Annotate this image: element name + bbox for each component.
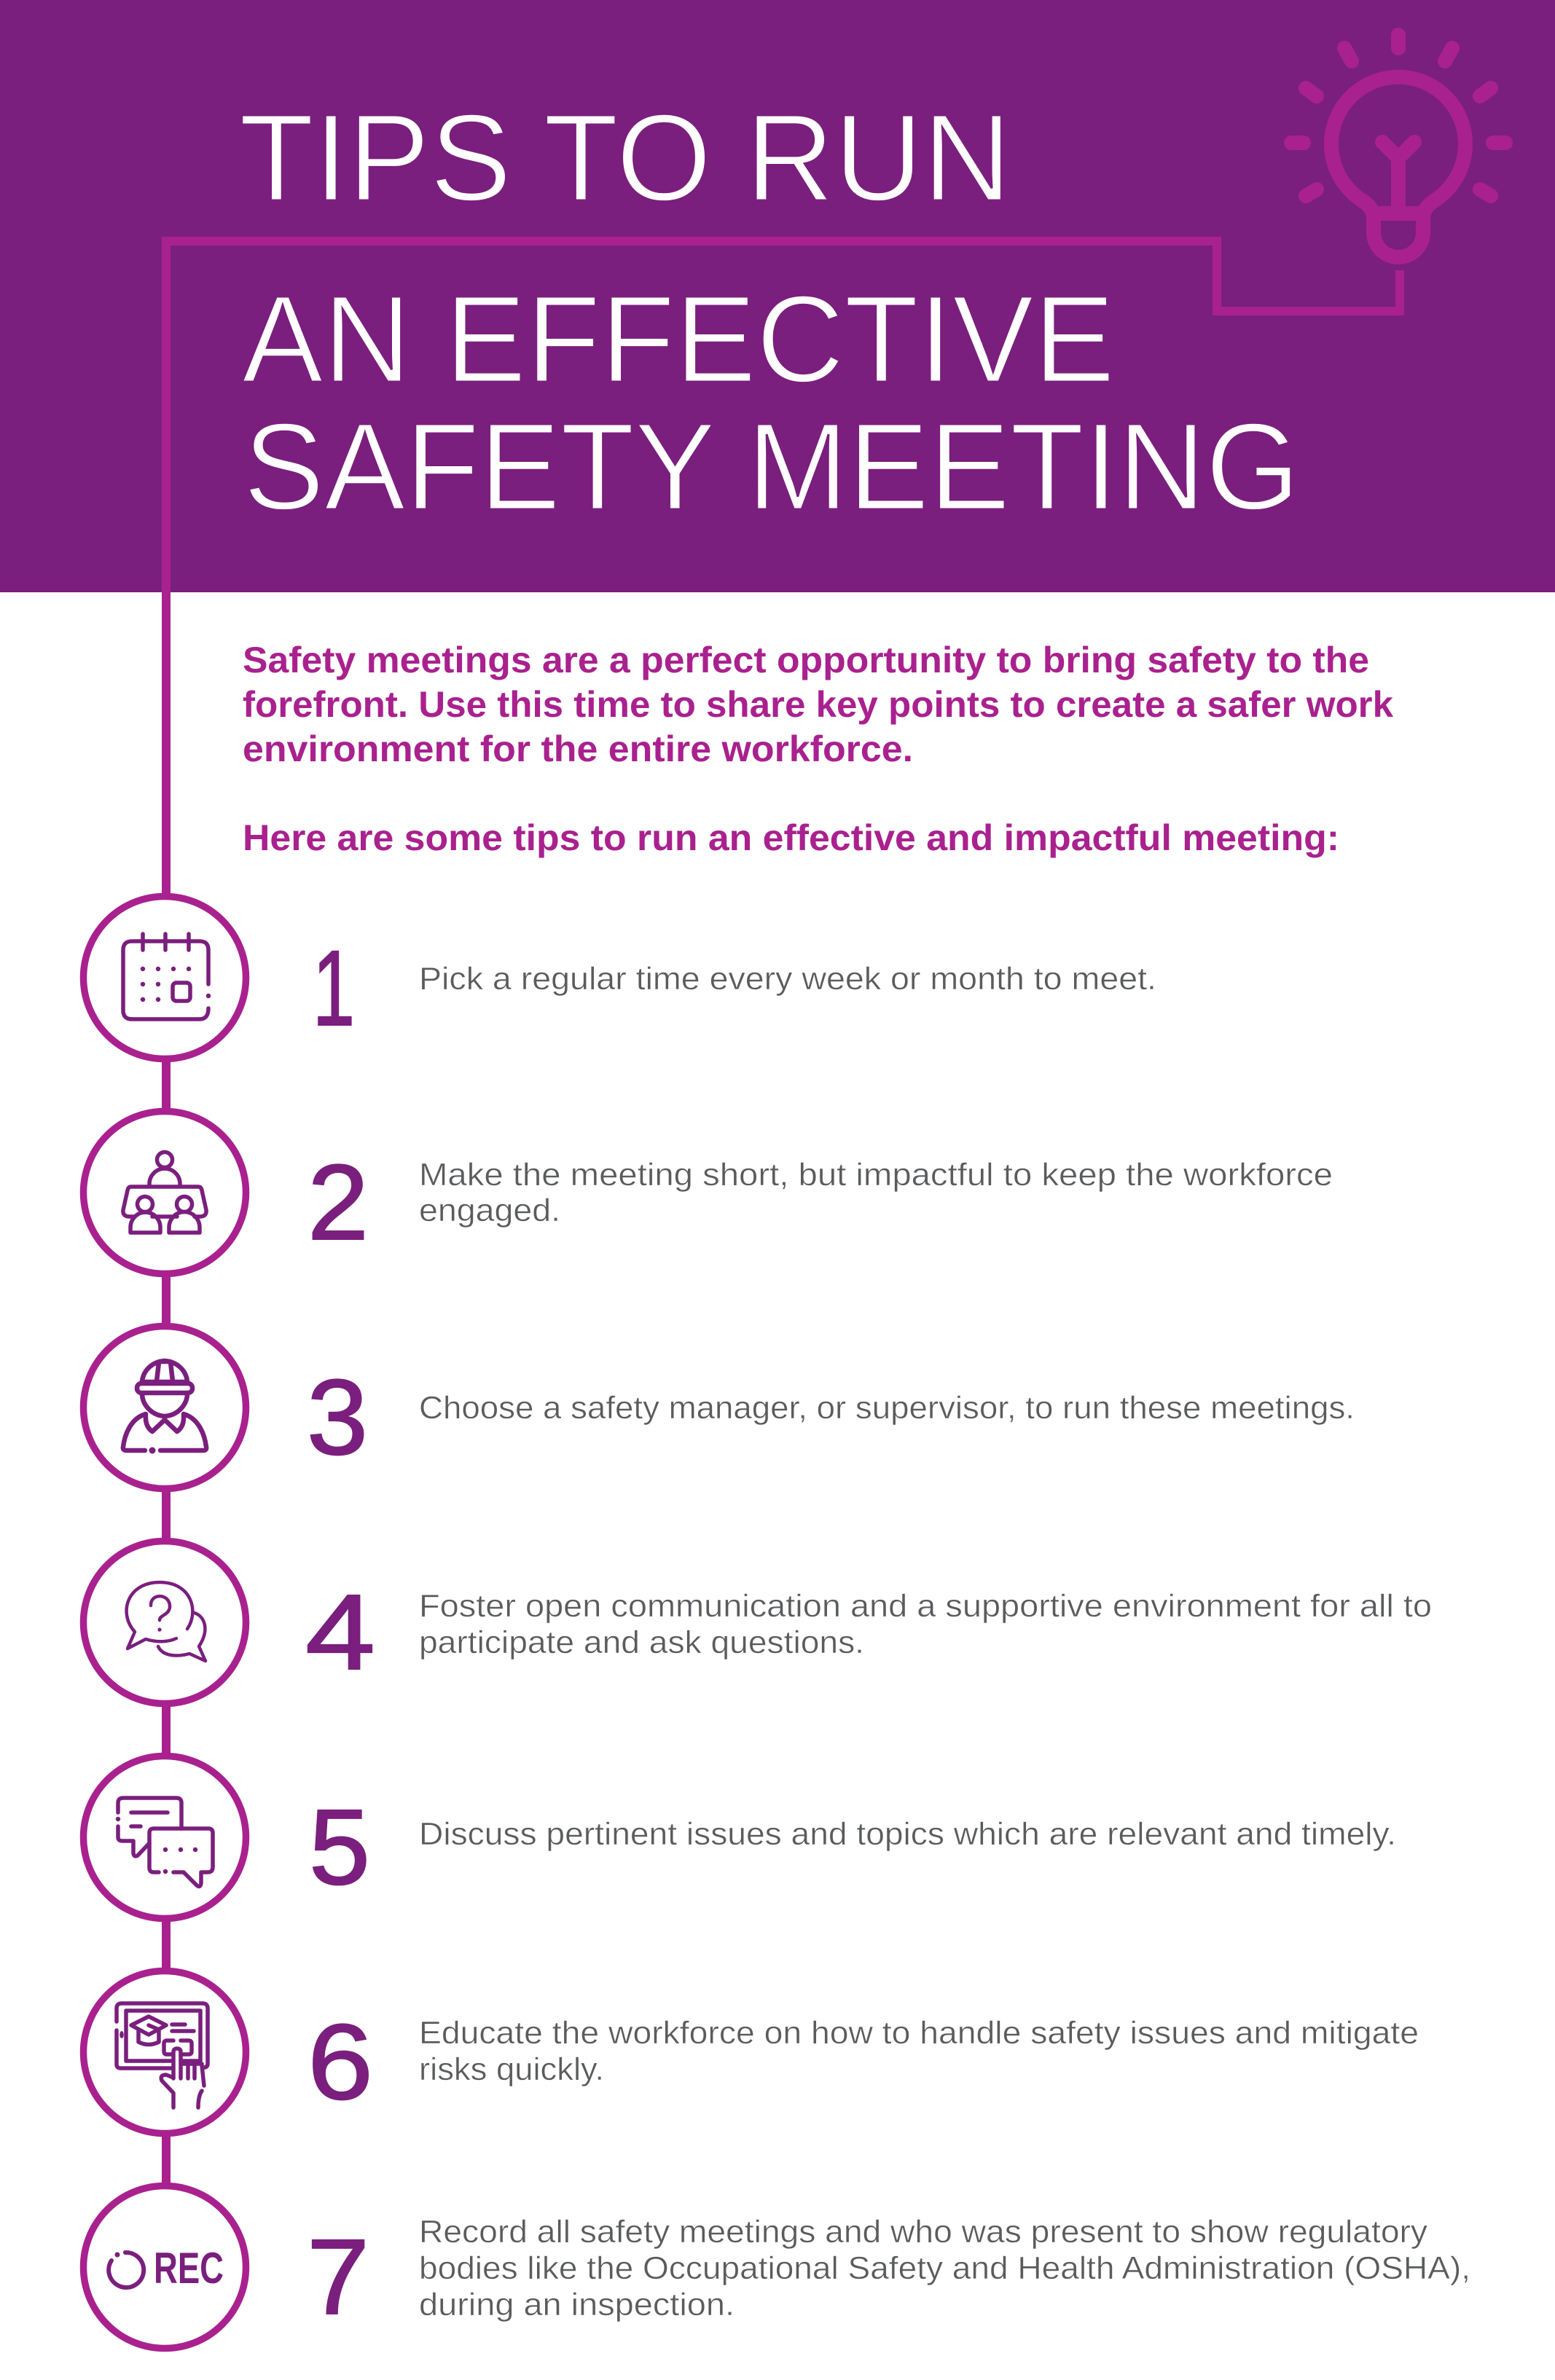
text 6: Educate the workforce on how to handle safety issues and mitigate	[419, 2015, 1419, 2051]
number 5: 5	[309, 1788, 370, 1907]
icon: calendar	[83, 896, 246, 1059]
step 2	[83, 1112, 1333, 1273]
header banner	[0, 0, 1555, 592]
icon: lightbulb	[1291, 35, 1505, 257]
step 4	[83, 1541, 1432, 1703]
connector line from lightbulb through steps	[166, 241, 1400, 2185]
number 3: 3	[307, 1358, 368, 1477]
text 1: Pick a regular time every week or month to meet.	[419, 961, 1156, 997]
text 4: participate and ask questions.	[419, 1625, 864, 1660]
text 5: Discuss pertinent issues and topics which are relevant and timely.	[419, 1816, 1396, 1852]
text 7: bodies like the Occupational Safety and Health Administration (OSHA),	[419, 2250, 1470, 2286]
step 1	[83, 896, 1156, 1059]
number 7: 7	[307, 2218, 369, 2337]
text 6: risks quickly.	[419, 2051, 604, 2087]
step 3	[83, 1326, 1355, 1489]
icon: chat bubbles	[83, 1756, 246, 1919]
title: AN EFFECTIVE	[242, 270, 1115, 409]
title: TIPS TO RUN	[239, 89, 1011, 227]
number 6: 6	[308, 2003, 373, 2122]
title	[239, 89, 1300, 536]
text 6	[419, 2015, 1419, 2087]
step 6	[83, 1971, 1419, 2133]
intro text: environment for the entire workforce.	[243, 728, 913, 769]
icon: meeting table	[83, 1112, 246, 1273]
number 1: 1	[313, 929, 355, 1048]
icon: REC	[83, 2185, 246, 2349]
number 4: 4	[305, 1573, 375, 1692]
title: SAFETY MEETING	[243, 398, 1300, 536]
intro text	[243, 640, 1393, 858]
icon: worker with hard hat	[83, 1326, 246, 1489]
text 2: Make the meeting short, but impactful to keep the workforce	[419, 1157, 1333, 1193]
icon: tablet with graduation cap and hand	[83, 1971, 246, 2133]
icon: question speech bubbles	[83, 1541, 246, 1703]
step 7	[83, 2185, 1470, 2349]
text 2: engaged.	[419, 1193, 560, 1228]
intro text: Safety meetings are a perfect opportunity to bring safety to the	[243, 640, 1369, 680]
text 7	[419, 2214, 1470, 2322]
icon: REC: REC	[154, 2244, 224, 2293]
text 7: during an inspection.	[419, 2287, 735, 2322]
intro text: Here are some tips to run an effective and impactful meeting:	[243, 817, 1339, 858]
step 5	[83, 1756, 1396, 1919]
text 2	[419, 1157, 1333, 1228]
text 3: Choose a safety manager, or supervisor, to run these meetings.	[419, 1390, 1355, 1426]
text 4: Foster open communication and a supportive environment for all to	[419, 1588, 1432, 1624]
number 2: 2	[308, 1143, 369, 1262]
text 7: Record all safety meetings and who was present to show regulatory	[419, 2214, 1427, 2250]
text 4	[419, 1588, 1432, 1660]
intro text: forefront. Use this time to share key points to create a safer work	[243, 684, 1393, 725]
